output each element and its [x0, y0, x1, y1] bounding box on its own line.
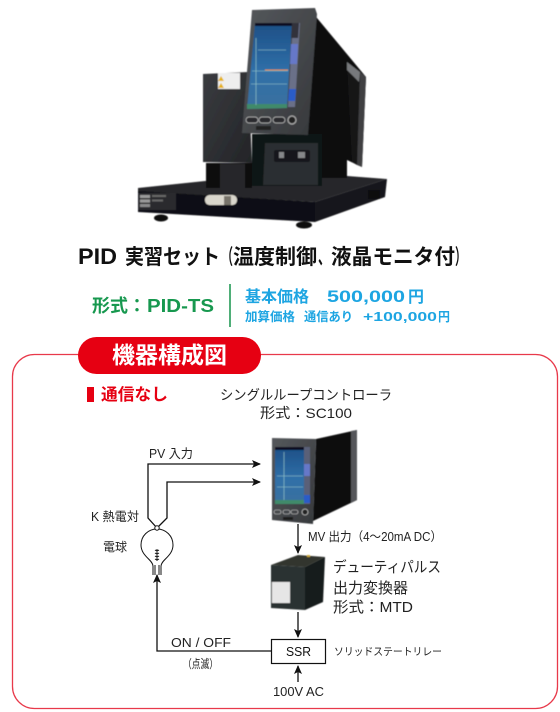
title: 液晶モニタ付: [331, 246, 455, 269]
base price: 500,000: [327, 287, 405, 306]
base plate: [138, 176, 387, 228]
label: 100V AC: 100V AC: [273, 685, 324, 699]
arrow: 100V AC to SSR: [297, 666, 299, 682]
controller SC100 photo: [272, 430, 357, 524]
label: K thermocouple: K 熱電対: [91, 510, 139, 524]
label: solid state relay: ソリッドステートリレー: [334, 646, 442, 658]
SSR box: SSR: [286, 645, 311, 659]
heading pill: equipment configuration diagram: [78, 337, 261, 374]
arrow: MV output: [297, 524, 299, 553]
section heading: no communication: 通信なし: [101, 385, 168, 404]
lower stand: [206, 134, 322, 188]
rear side panel: [347, 62, 366, 167]
label: duty pulse output converter: 形式：MTD: [333, 599, 413, 616]
title: ）: [455, 246, 466, 269]
base price: 基本価格: [245, 287, 309, 306]
heading pill: equipment configuration diagram: 機器構成図: [112, 342, 227, 368]
label: MV output: MV 出力（4～20mA DC）: [308, 530, 442, 544]
additional price: 円: [438, 310, 450, 324]
lamp socket: [205, 195, 237, 205]
base price: 円: [408, 289, 424, 306]
title: [78, 244, 466, 269]
controller label: [220, 387, 392, 421]
title: PID: [78, 244, 117, 269]
label: duty pulse output converter: [333, 558, 441, 616]
additional price: [245, 309, 450, 324]
label: blinking: （点滅）: [183, 657, 218, 671]
divider between model and price: [229, 284, 231, 327]
nameplate: [138, 193, 176, 210]
title: 温度制御: [233, 246, 317, 269]
additional price: +100,000: [363, 309, 437, 324]
label: duty pulse output converter: 出力変換器: [333, 580, 408, 597]
product photo: PID training set: [138, 8, 387, 228]
model number: ：: [128, 296, 146, 316]
label: light bulb: 電球: [103, 539, 127, 554]
arrow: converter to SSR: [297, 612, 299, 637]
title: 実習セット: [125, 246, 220, 269]
panel: equipment configuration: [12, 354, 558, 708]
controller label: シングルループコントローラ: [220, 387, 392, 403]
title: （: [222, 246, 233, 269]
arrow: ON/OFF from SSR to bulb: [157, 575, 271, 651]
additional price: 加算価格: [245, 309, 295, 324]
controller label: 形式：SC100: [260, 405, 352, 421]
label: PV input: PV 入力: [149, 447, 193, 461]
base price: [245, 287, 424, 306]
duty pulse converter MTD photo: [271, 555, 325, 610]
additional price: 通信あり: [304, 309, 353, 324]
rear housing: [300, 12, 366, 178]
label: ON / OFF: ON / OFF: [171, 635, 231, 650]
label: duty pulse output converter: デューティパルス: [333, 558, 441, 576]
model number: PID-TS: [147, 295, 214, 316]
SSR box: [272, 640, 326, 664]
LCD monitor: [242, 8, 317, 135]
icon: light bulb: [141, 526, 173, 575]
wiring: PV input lines: [148, 464, 260, 528]
model number: [92, 295, 214, 316]
title: 、: [318, 246, 330, 269]
model number: 形式: [92, 296, 128, 316]
heater box with warning label: [203, 72, 252, 163]
